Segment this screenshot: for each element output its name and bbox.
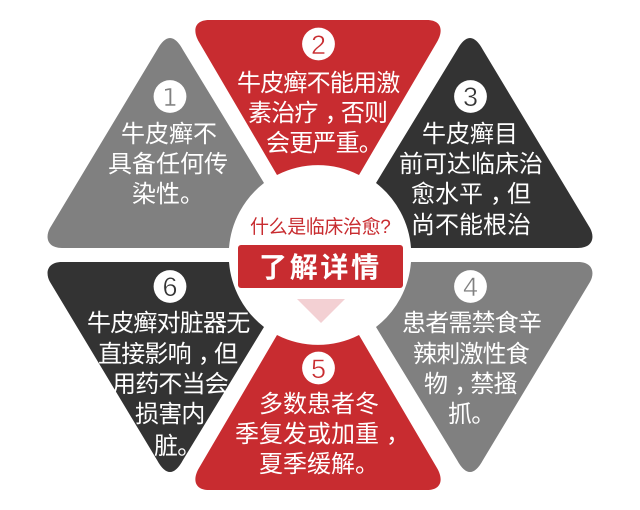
number 1 [154, 80, 186, 113]
text 6: 用药不当会 [112, 371, 229, 398]
text 5: 多数患者冬 [259, 391, 379, 418]
panel 1 [48, 38, 264, 248]
text 6: 脏。 [154, 433, 200, 460]
text 4: 物 ，禁搔 [424, 371, 518, 398]
panel 6 [48, 262, 264, 472]
number 6: 6 [162, 272, 178, 302]
text 2: 会更严重。 [266, 130, 382, 157]
number 4: 4 [463, 272, 478, 302]
text 6: 牛皮癣对脏器无 [87, 310, 250, 337]
text 6: 直接影响 ，但 [98, 341, 238, 368]
text 3: 牛皮癣目 [422, 121, 518, 148]
number 3: 3 [463, 82, 478, 112]
text 1: 染性。 [132, 181, 204, 208]
text 5: 夏季缓解。 [259, 451, 379, 478]
text 4: 辣刺激性食 [413, 341, 530, 368]
center button: 了解详情 [259, 252, 382, 283]
number 2 [302, 28, 335, 60]
panel 4 [376, 262, 592, 472]
number 3 [454, 80, 487, 113]
text 4: 患者需禁食辛 [402, 310, 541, 337]
number 6 [154, 270, 186, 303]
center button [238, 245, 403, 288]
text 4: 抓。 [448, 401, 494, 428]
panel 2 [195, 20, 441, 175]
text 6: 损害内 [135, 401, 205, 428]
text 1: 牛皮癣不 [121, 121, 217, 148]
text 2: 牛皮癣不能用激 [237, 70, 400, 97]
text 2 [237, 70, 400, 157]
text 3 [399, 121, 543, 239]
panel 3 [376, 38, 592, 248]
panel 5 [195, 335, 441, 490]
text 2: 素治疗 ，否则 [248, 100, 387, 127]
number 5: 5 [311, 354, 326, 384]
text 6 [87, 310, 250, 460]
down arrow [297, 299, 345, 323]
text 3: 前可达临床治 [399, 151, 543, 178]
text 4 [402, 310, 541, 428]
text 3: 愈水平 ，但 [411, 181, 531, 208]
number 2: 2 [311, 30, 326, 60]
center question: 什么是临床治愈? [250, 216, 390, 238]
number 4 [454, 270, 487, 303]
number 1: 1 [162, 83, 178, 112]
text 3: 尚不能根治 [411, 212, 531, 239]
text 5: 季复发或加重 ， [235, 421, 410, 448]
number 5 [302, 352, 335, 384]
text 5 [235, 391, 410, 478]
text 1: 具备任何传 [108, 151, 228, 178]
text 1 [108, 121, 228, 208]
